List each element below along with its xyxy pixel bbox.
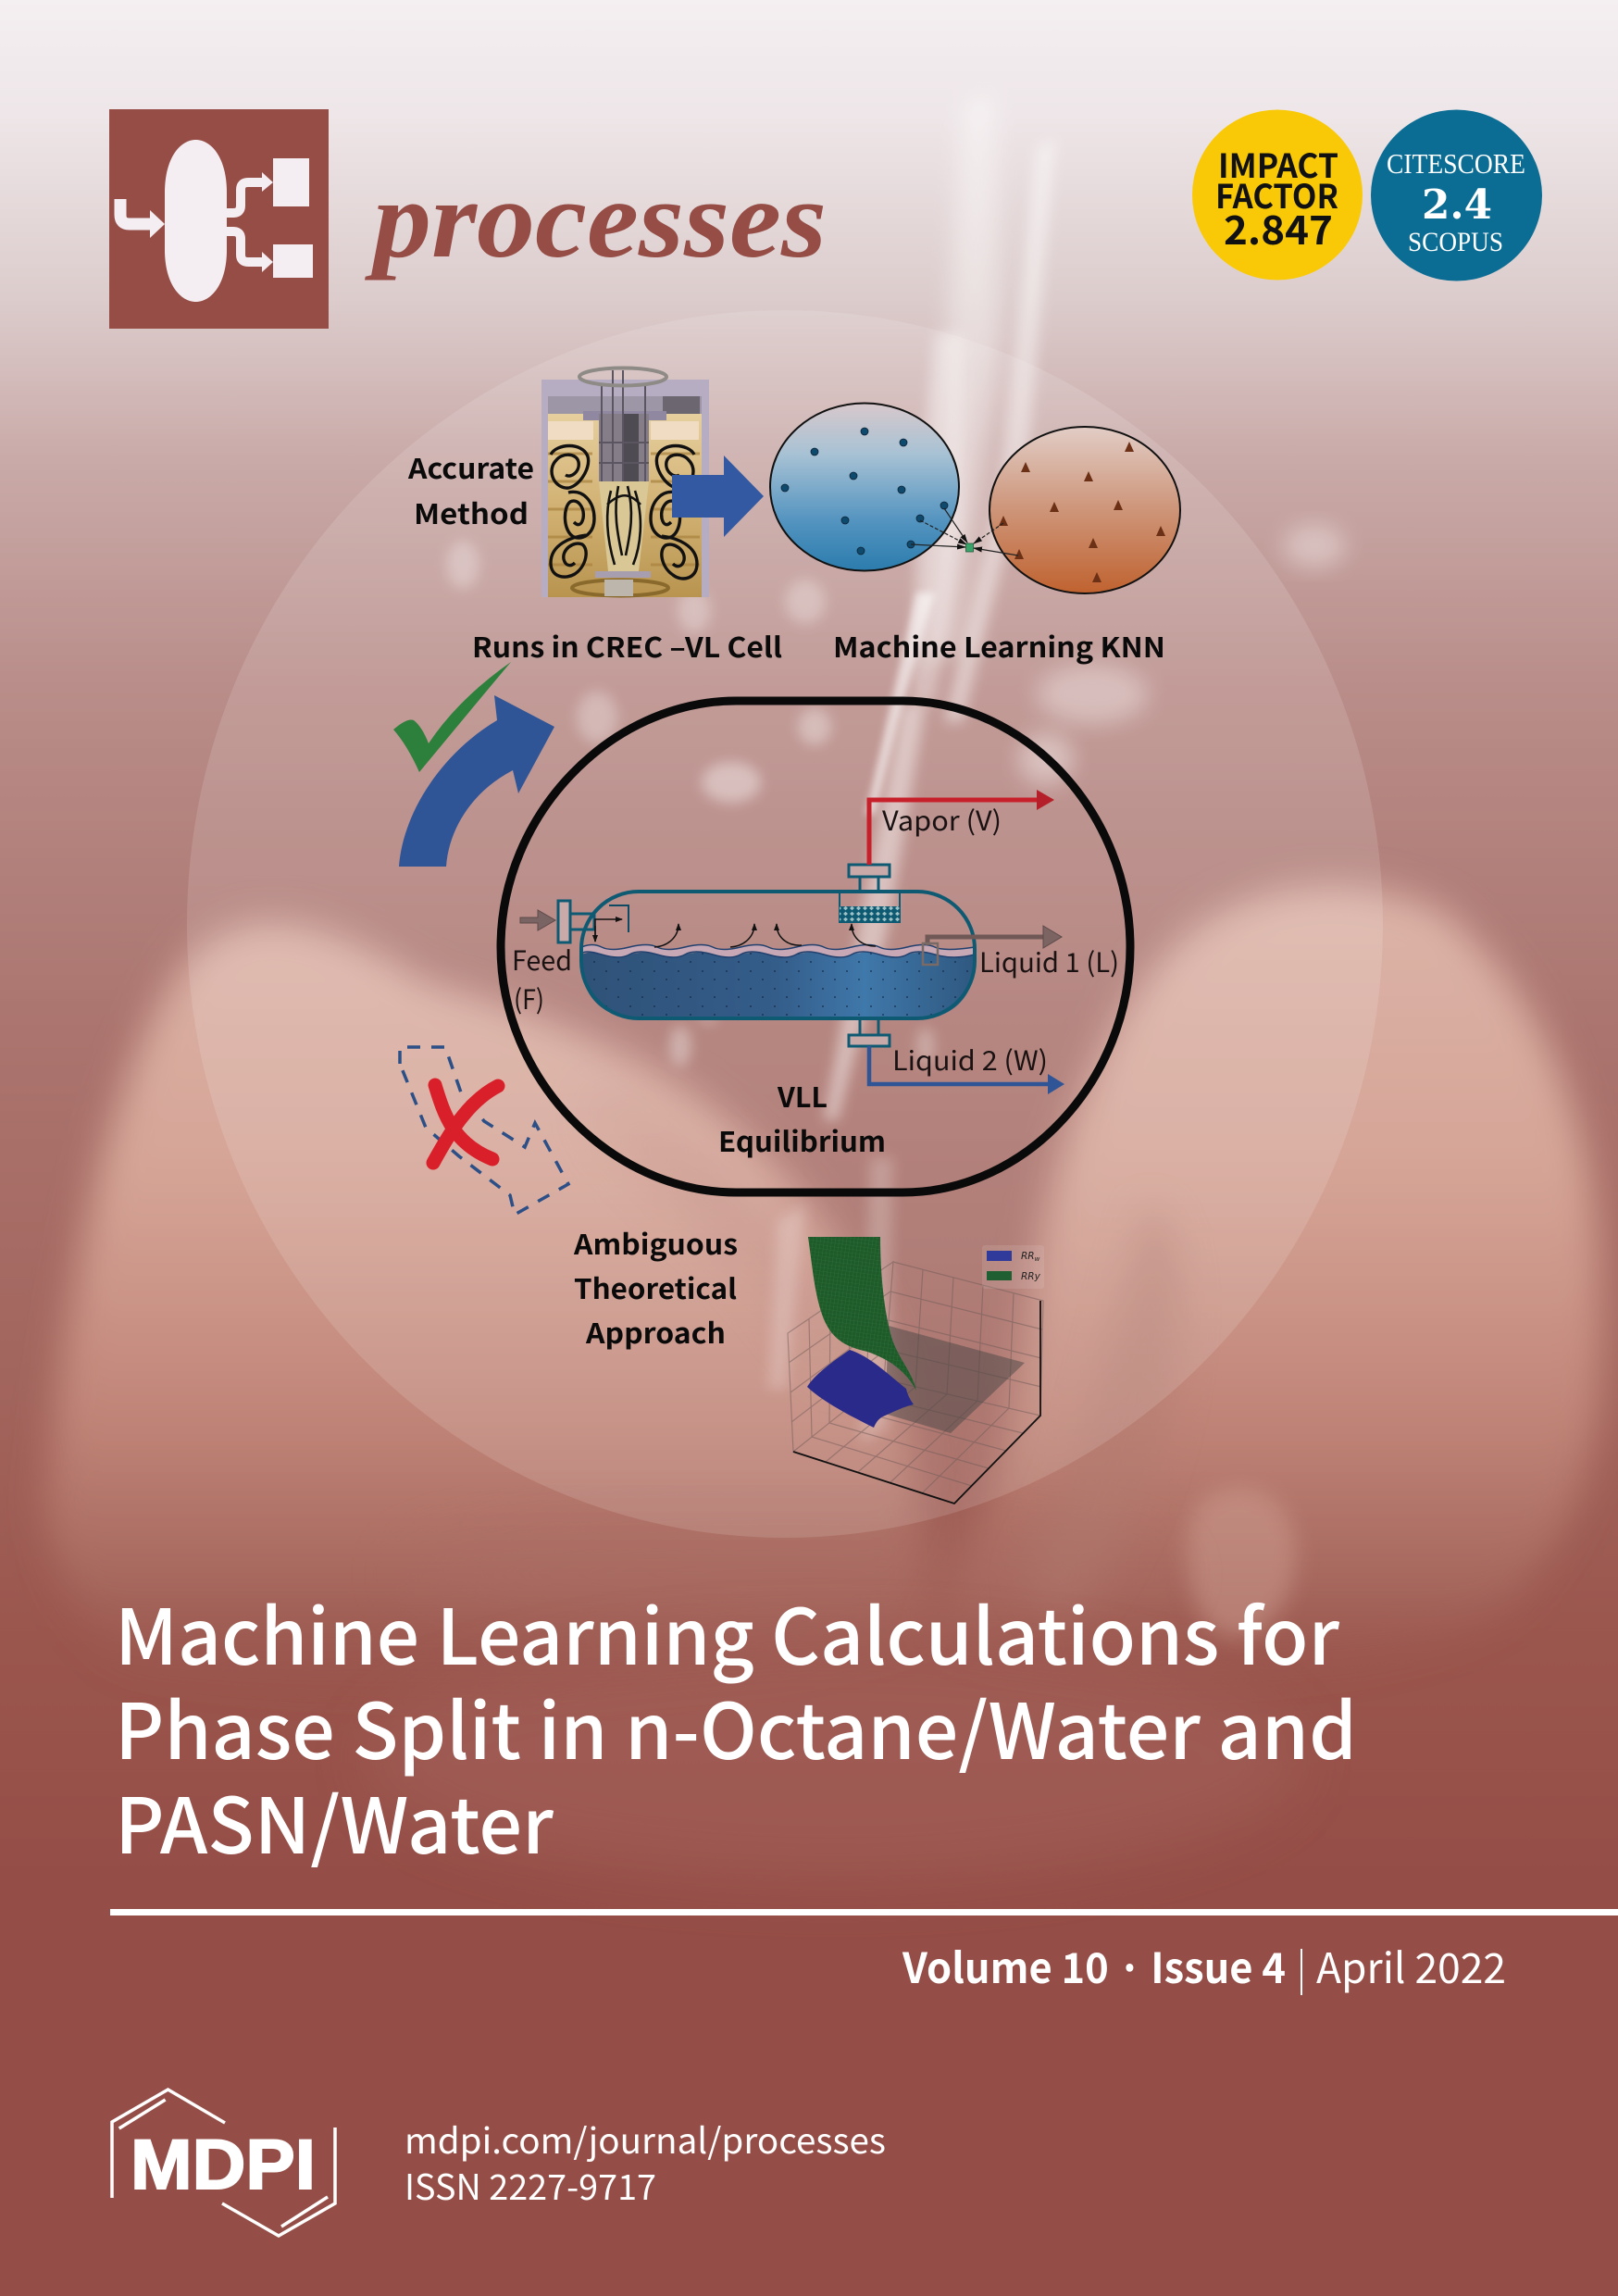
text: accurate method <box>407 446 534 532</box>
label: feed: (F) <box>514 979 544 1017</box>
badge: impact factor: FACTOR <box>1215 170 1338 218</box>
cover title: Machine Learning Calculations for <box>115 1576 1340 1687</box>
text: accurate method: Method <box>414 492 529 532</box>
icon: circulation swirls <box>551 446 697 579</box>
badge: citescore <box>1371 109 1542 281</box>
label: vapor: Vapor (V) <box>882 800 1002 839</box>
cover title <box>115 1576 1357 1876</box>
text: ambiguous theoretical approach <box>573 1222 738 1352</box>
journal url and ISSN: ISSN 2227-9717 <box>404 2159 656 2210</box>
issue information: April 2022 <box>1316 1935 1506 1995</box>
icon: lower outlet <box>227 231 273 272</box>
journal url and ISSN: mdpi.com/journal/processes <box>404 2113 886 2164</box>
label: feed <box>512 940 572 1017</box>
issue information: Volume 10 · Issue 4 <box>902 1935 1286 1995</box>
finger shadow folds <box>1027 1204 1181 1612</box>
label: VLL equilibrium: Equilibrium <box>718 1119 886 1160</box>
translucent circular panel <box>187 310 1383 1538</box>
icon: bottom product box <box>273 244 313 278</box>
grid walls and floor <box>788 1262 1043 1493</box>
arrow: vapor head <box>1037 790 1054 810</box>
diagram: CREC-VL cell <box>541 368 709 597</box>
text: ambiguous theoretical approach: Approach <box>585 1311 726 1352</box>
icon: inlet arrow <box>120 199 165 238</box>
logo: MDPI: MDPI <box>131 2126 316 2204</box>
arrow: vapor <box>869 800 1039 865</box>
interface band <box>581 944 975 957</box>
arrow: liquid 2 <box>869 1046 1064 1094</box>
icon: top stirrer ring <box>579 368 666 385</box>
icon: green check mark <box>393 662 511 772</box>
journal title: processes <box>365 157 827 281</box>
feed nozzle <box>558 901 594 942</box>
legend: w <box>1035 1255 1040 1263</box>
water streams <box>446 93 1346 1444</box>
left hand <box>46 922 926 1693</box>
label: VLL equilibrium <box>718 1075 886 1160</box>
diagram: KNN orange cluster <box>989 427 1180 593</box>
legend: RR <box>1021 1251 1035 1262</box>
cover title: PASN/Water <box>115 1765 554 1876</box>
right hand <box>926 886 1602 1677</box>
icon: upper outlet <box>227 172 273 213</box>
arrow: feed <box>520 910 555 930</box>
arrow: cell to machine learning <box>672 455 764 537</box>
text: accurate method: Accurate <box>407 446 534 487</box>
badge: impact factor: 2.847 <box>1224 199 1333 256</box>
label: liquid 1: Liquid 1 (L) <box>979 942 1119 980</box>
diagram: flash separator vessel <box>558 865 975 1046</box>
diagram: nearest neighbour arrows and query point <box>911 508 1018 555</box>
badge: impact factor: IMPACT <box>1218 140 1338 188</box>
journal url and ISSN <box>404 2113 886 2210</box>
text: ambiguous theoretical approach: Theoretical <box>574 1267 737 1307</box>
liquid phase <box>581 952 975 1018</box>
legend: RRy <box>1021 1271 1041 1282</box>
logo: MDPI <box>112 2090 335 2236</box>
badge: impact factor <box>1192 109 1363 280</box>
diagram: KNN blue cluster <box>770 404 959 570</box>
badge: citescore: SCOPUS <box>1408 227 1503 257</box>
issue information <box>902 1935 1506 1995</box>
badge: citescore: CITESCORE <box>1387 147 1525 180</box>
caption: machine learning KNN: Machine Learning KNN <box>833 625 1165 666</box>
frame: VLL equilibrium oval <box>501 701 1130 1192</box>
icon: top product box <box>273 158 309 206</box>
axes <box>793 1301 1040 1504</box>
arrow: curved blue arrow <box>399 695 554 867</box>
bottom nozzle <box>849 1018 890 1046</box>
label: feed: Feed <box>512 940 572 979</box>
text: ambiguous theoretical approach: Ambiguous <box>573 1222 738 1263</box>
badge: citescore: 2.4 <box>1422 181 1492 229</box>
plane shadow <box>885 1326 1025 1433</box>
icon: dashed rejected region <box>400 1047 568 1215</box>
caption: runs in CREC-VL cell: Runs in CREC –VL Cell <box>472 625 782 666</box>
icon: vessel capsule <box>165 140 227 302</box>
icon: red cross <box>433 1085 498 1163</box>
green surface <box>808 1237 916 1391</box>
label: VLL equilibrium: VLL <box>777 1075 828 1116</box>
label: liquid 2: Liquid 2 (W) <box>892 1040 1048 1079</box>
blue surface <box>807 1350 914 1428</box>
vessel outline <box>581 892 975 1018</box>
inlet baffle and flow arrows <box>595 905 876 947</box>
divider rule <box>110 1909 1618 1915</box>
legend <box>982 1245 1044 1289</box>
cover title: Phase Split in n-Octane/Water and <box>115 1670 1357 1781</box>
arrow: liquid 1 <box>923 926 1062 965</box>
top nozzle and demister <box>840 865 900 922</box>
logo: processes journal mark <box>109 109 329 329</box>
icon: bottom stirrer ring <box>572 580 668 596</box>
chart: 3D surface plot <box>788 1237 1044 1504</box>
